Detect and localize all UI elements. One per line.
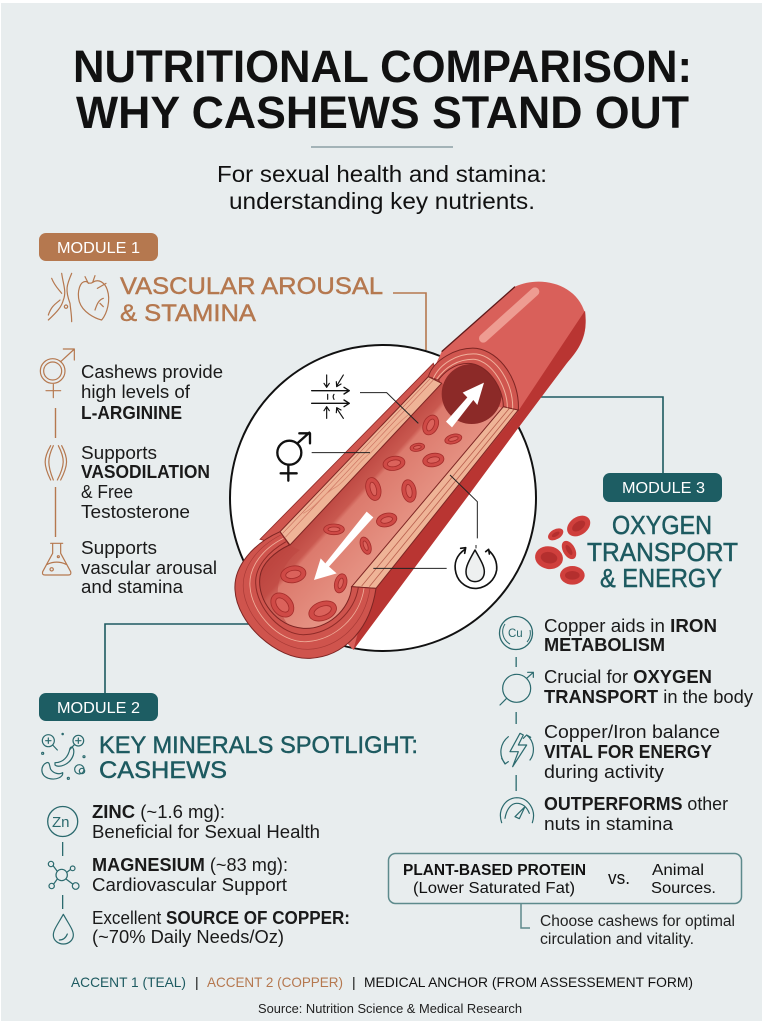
icon: vessels and heart <box>48 273 109 322</box>
heading: key minerals: CASHEWS <box>99 757 227 784</box>
text: zinc <box>92 802 320 842</box>
far lumen opening <box>442 364 502 424</box>
text: energy <box>544 722 720 782</box>
panel: module 2 <box>39 693 418 947</box>
lumen <box>260 382 503 628</box>
connector: module 1 to vessel <box>393 293 426 350</box>
title: WHY CASHEWS STAND OUT <box>76 87 689 138</box>
text: arousal and stamina <box>81 538 217 597</box>
upper cut wall <box>280 377 442 545</box>
text: zinc: ZINC (~1.6 mg): <box>92 802 225 822</box>
icon: copper: Cu <box>508 628 523 640</box>
text: energy: VITAL FOR ENERGY <box>544 742 712 762</box>
panel: module 1 <box>39 233 383 597</box>
text: magnesium: Cardiovascular Support <box>92 875 287 895</box>
text: oxygen transport <box>544 667 753 707</box>
text: advice: circulation and vitality. <box>540 931 694 948</box>
heading: vascular arousal <box>120 273 383 327</box>
text: l-arginine: Cashews provide <box>81 362 223 382</box>
icon: vessel dilation <box>45 446 67 480</box>
callout: plant protein comparison: PLANT-BASED PROTEIN <box>403 862 586 879</box>
heading: vascular arousal: VASCULAR AROUSAL <box>120 273 383 300</box>
text: vasodilation: Testosterone <box>81 502 190 522</box>
callout: plant protein comparison <box>388 854 742 904</box>
upper outer band <box>260 363 440 547</box>
module 2 badge <box>39 693 158 721</box>
subtitle <box>217 161 547 214</box>
text: outperforms <box>544 794 728 834</box>
icon: zinc <box>48 806 78 836</box>
red blood cells <box>266 413 463 625</box>
text: oxygen transport: TRANSPORT in the body <box>544 687 753 707</box>
text: advice <box>540 913 735 948</box>
text: iron metabolism <box>544 616 717 655</box>
panel: module 3 <box>500 473 753 834</box>
icon: copper <box>500 616 532 650</box>
connector: module 2 to vessel <box>105 624 250 693</box>
text: energy: Copper/Iron balance <box>544 722 720 742</box>
text: l-arginine: L-ARGININE <box>81 403 182 423</box>
icon: magnesium molecule <box>48 861 79 889</box>
text: iron metabolism: Copper aids in IRON <box>544 616 717 636</box>
icon: gender symbol <box>277 433 310 481</box>
text: energy: during activity <box>544 762 664 782</box>
text: advice: Choose cashews for optimal <box>540 913 735 930</box>
white circle behind vessel <box>230 345 536 651</box>
module 3 badge <box>603 473 722 502</box>
title: NUTRITIONAL COMPARISON: <box>73 41 692 92</box>
callout: plant protein comparison: Sources. <box>651 880 716 897</box>
module 1 badge <box>39 233 158 261</box>
legend: MEDICAL ANCHOR (FROM ASSESSEMENT FORM) <box>364 974 693 990</box>
heading: vascular arousal: & STAMINA <box>120 300 256 327</box>
icon: copper drop <box>53 914 73 944</box>
heading: oxygen transport: TRANSPORT <box>587 537 738 567</box>
text: outperforms: OUTPERFORMS other <box>544 794 728 814</box>
icon: gender copper <box>40 349 74 398</box>
icon: oxygen transport <box>500 672 533 705</box>
text: vasodilation: & Free <box>81 482 133 502</box>
module 3 badge: MODULE 3 <box>622 480 705 497</box>
subtitle: For sexual health and stamina: <box>217 161 547 187</box>
text: l-arginine: high levels of <box>81 382 191 402</box>
legend: ACCENT 2 (COPPER) <box>207 974 343 990</box>
icon: drop with cycle arrows <box>455 548 497 588</box>
text: oxygen transport: Crucial for OXYGEN <box>544 667 712 687</box>
text: arousal and stamina: and stamina <box>81 577 184 597</box>
vessel outer tube <box>320 282 586 650</box>
text: vasodilation: Supports <box>81 443 157 463</box>
text: iron metabolism: METABOLISM <box>544 635 665 655</box>
callout: plant protein comparison: vs. <box>608 868 630 888</box>
arrow: flow down <box>314 512 373 580</box>
arrow: flow up <box>446 383 484 427</box>
heading: oxygen transport <box>587 510 738 593</box>
heading: key minerals <box>99 732 418 784</box>
text: zinc: Beneficial for Sexual Health <box>92 822 320 842</box>
text: vasodilation: VASODILATION <box>81 462 210 482</box>
icon: vasoconstriction arrows <box>312 375 349 418</box>
leader lines <box>312 393 477 568</box>
callout: plant protein comparison: Animal <box>652 862 704 879</box>
module 2 badge: MODULE 2 <box>57 700 140 717</box>
near end ring <box>235 532 376 658</box>
text: magnesium: MAGNESIUM (~83 mg): <box>92 855 288 875</box>
text: l-arginine <box>81 362 223 423</box>
title <box>73 41 692 138</box>
text: outperforms: nuts in stamina <box>544 814 674 834</box>
text: vasodilation <box>81 443 210 522</box>
source line: Source: Nutrition Science & Medical Research <box>258 1002 522 1016</box>
heading: oxygen transport: & ENERGY <box>600 563 722 593</box>
blood vessel illustration <box>235 282 586 658</box>
icon: cashews and minerals <box>42 733 85 779</box>
icon: gauge <box>500 798 533 823</box>
legend <box>71 974 693 990</box>
legend: | <box>352 974 356 990</box>
heading: oxygen transport: OXYGEN <box>612 510 712 540</box>
legend: | <box>195 974 199 990</box>
icon: flask <box>42 543 71 575</box>
callout: plant protein comparison: (Lower Saturated Fat) <box>413 880 575 897</box>
lower cut wall <box>352 407 518 588</box>
module 1 badge: MODULE 1 <box>57 240 140 257</box>
legend: ACCENT 1 (TEAL) <box>71 974 186 990</box>
text: copper: Excellent SOURCE OF COPPER: <box>92 908 350 928</box>
subtitle: understanding key nutrients. <box>229 188 535 214</box>
heading: key minerals: KEY MINERALS SPOTLIGHT: <box>99 732 418 759</box>
icon: zinc: Zn <box>52 814 70 831</box>
text: arousal and stamina: vascular arousal <box>81 558 217 578</box>
text: copper <box>92 908 350 947</box>
connector: callout to advice <box>521 904 530 928</box>
connector: module 3 to vessel <box>540 397 663 473</box>
text: copper: (~70% Daily Needs/Oz) <box>92 927 284 947</box>
icon: red blood cells <box>533 511 594 585</box>
text: arousal and stamina: Supports <box>81 538 157 558</box>
icon: energy bolt <box>501 733 533 767</box>
text: magnesium <box>92 855 288 895</box>
far end ring <box>428 348 518 410</box>
